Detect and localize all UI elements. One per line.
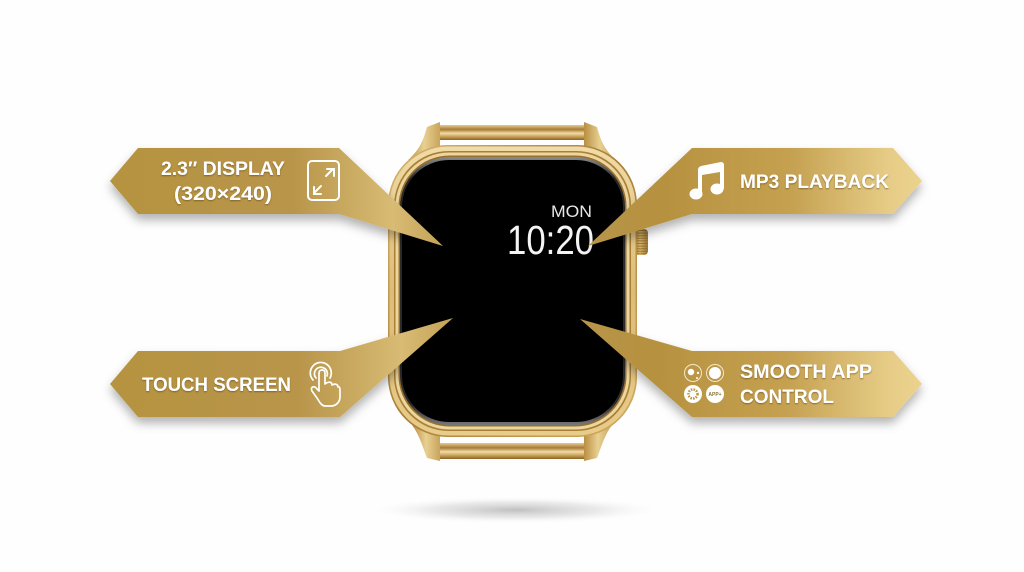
- touch label: TOUCH SCREEN: [142, 375, 291, 396]
- display label: 2.3″ DISPLAY: [161, 159, 285, 180]
- icon: touch hand: [310, 362, 340, 406]
- watch: [388, 122, 648, 461]
- callout: touch screen: [110, 318, 453, 417]
- bottom lugs: [412, 425, 612, 461]
- icon: app grid: [684, 364, 724, 403]
- callout: app control: [580, 319, 922, 417]
- crown: [632, 229, 648, 255]
- top band: [438, 125, 586, 140]
- watch screen: [402, 160, 623, 422]
- app label: SMOOTH APP: [740, 362, 872, 383]
- day label: MON: [551, 202, 592, 221]
- display label: [161, 159, 285, 205]
- app label: [740, 362, 872, 408]
- time: 10:20: [507, 217, 594, 263]
- watch case: [388, 145, 637, 437]
- callout: mp3: [588, 148, 922, 246]
- bottom band: [438, 443, 586, 459]
- display label: (320×240): [174, 184, 272, 205]
- icon: music note: [690, 162, 724, 200]
- ground shadow: [365, 496, 665, 524]
- top lugs: [408, 122, 616, 160]
- mp3 label: MP3 PLAYBACK: [740, 172, 889, 193]
- app label: CONTROL: [740, 387, 834, 408]
- icon: app grid: APP+: [708, 392, 722, 398]
- icon: expand: [308, 161, 339, 200]
- callout: display: [110, 148, 443, 246]
